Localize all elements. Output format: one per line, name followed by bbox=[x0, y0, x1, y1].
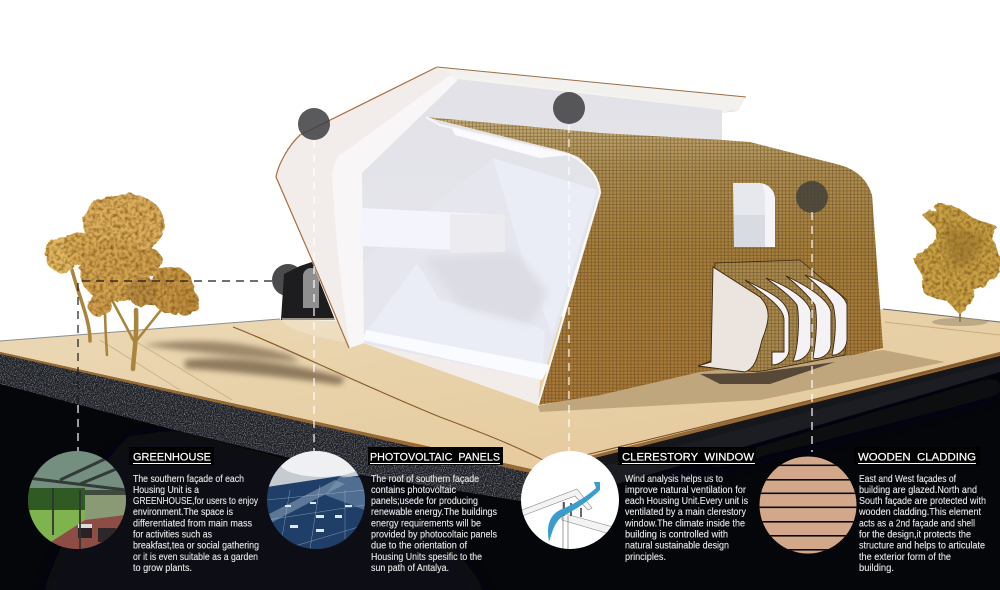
text block: photovoltaic: energy requirements will be bbox=[371, 518, 481, 530]
text block: photovoltaic: Housing Units spesific to the bbox=[371, 552, 482, 563]
photo circle: solar panels bbox=[267, 449, 365, 549]
porch hood bbox=[698, 260, 847, 372]
text block: greenhouse: Housing Unit is a bbox=[133, 485, 199, 496]
text block: greenhouse: environment.The space is bbox=[133, 507, 233, 518]
text block: wooden cladding: for the design,it protects the bbox=[859, 530, 971, 540]
text block: photovoltaic: contains photovoltaic bbox=[371, 485, 456, 496]
foam edge of model base bbox=[0, 354, 1000, 501]
text block: photovoltaic: sun path of Antalya. bbox=[371, 563, 449, 574]
text block: wooden cladding: wooden cladding.This element bbox=[858, 507, 981, 518]
building bbox=[276, 67, 883, 405]
text block: greenhouse: The southern façade of each bbox=[133, 474, 244, 485]
interior recess bbox=[362, 78, 722, 380]
text block: clerestory: improve natural ventilation for bbox=[625, 485, 746, 496]
heading: clerestory window: CLERESTORY WINDOW bbox=[622, 452, 755, 464]
text block: clerestory: principles. bbox=[625, 552, 666, 563]
cladding marker bbox=[796, 181, 828, 213]
text block: greenhouse: breakfast,tea or social gathering bbox=[133, 540, 259, 552]
left tree group bbox=[45, 193, 199, 369]
text block: photovoltaic: provided by photocoltaic panels bbox=[371, 530, 497, 540]
wood clad shell bbox=[426, 117, 883, 405]
board seams bbox=[233, 327, 558, 468]
interior white band bbox=[360, 208, 505, 252]
cladding leader line bbox=[811, 212, 813, 452]
text block: clerestory: Wind analysis helps us to bbox=[625, 474, 723, 485]
text block: greenhouse: or it is even suitable as a garden bbox=[133, 552, 258, 563]
photovoltaic marker bbox=[298, 108, 330, 140]
text block: wooden cladding: the exterior form of the bbox=[859, 552, 951, 563]
roof clerestory volume bbox=[380, 67, 745, 140]
panel: clerestory text bbox=[618, 447, 756, 563]
dark base area bbox=[0, 350, 1000, 590]
text block: greenhouse: differentiated from main mass bbox=[133, 518, 252, 530]
diagram circle: clerestory window bbox=[521, 451, 619, 550]
right tree bbox=[913, 202, 1000, 326]
text block: greenhouse: for activities such as bbox=[133, 530, 212, 540]
text block: wooden cladding: building. bbox=[859, 563, 894, 574]
text block: photovoltaic: panels;usede for producing bbox=[371, 496, 478, 507]
wooden platform bbox=[0, 309, 1000, 482]
clerestory leader line bbox=[568, 125, 570, 452]
text block: photovoltaic: The roof of southern façade bbox=[371, 474, 479, 485]
panel: greenhouse text bbox=[129, 447, 262, 574]
text block: photovoltaic: due to the orientation of bbox=[371, 540, 467, 552]
panel: photovoltaic text bbox=[368, 447, 503, 574]
photovoltaic leader line bbox=[313, 140, 315, 452]
heading: photovoltaic panels: PHOTOVOLTAIC PANELS bbox=[370, 452, 500, 464]
greenhouse model bbox=[272, 262, 345, 342]
text block: wooden cladding: building are glazed.North and bbox=[859, 485, 977, 496]
text block: wooden cladding: acts as a 2nd façade and shell bbox=[859, 518, 975, 530]
clerestory side window bbox=[733, 183, 775, 247]
platform shadows bbox=[143, 341, 345, 385]
text block: clerestory: each Housing Unit.Every unit is bbox=[625, 496, 748, 507]
text block: greenhouse: to grow plants. bbox=[133, 563, 192, 574]
photo circle: greenhouse bbox=[28, 451, 126, 550]
text block: wooden cladding: East and West façades of bbox=[859, 474, 956, 485]
clerestory marker bbox=[553, 92, 585, 124]
text block: clerestory: ventilated by a main clerestory bbox=[625, 507, 747, 518]
text block: clerestory: building is controlled with bbox=[625, 530, 728, 540]
text block: clerestory: window.The climate inside the bbox=[624, 518, 745, 530]
text block: clerestory: natural sustainable design bbox=[625, 540, 729, 552]
heading: greenhouse: GREENHOUSE bbox=[133, 452, 211, 464]
greenhouse leader line bbox=[78, 281, 272, 452]
text block: wooden cladding: structure and helps to articulate bbox=[859, 540, 985, 552]
photo circle: wood cladding bbox=[759, 456, 857, 554]
text block: greenhouse: GREENHOUSE,for users to enjoy bbox=[133, 496, 259, 507]
heading: wooden cladding: WOODEN CLADDING bbox=[858, 452, 976, 464]
white south shell bbox=[276, 67, 560, 405]
text block: photovoltaic: renewable energy.The buildings bbox=[371, 507, 497, 518]
panel: wooden cladding text bbox=[854, 447, 989, 574]
